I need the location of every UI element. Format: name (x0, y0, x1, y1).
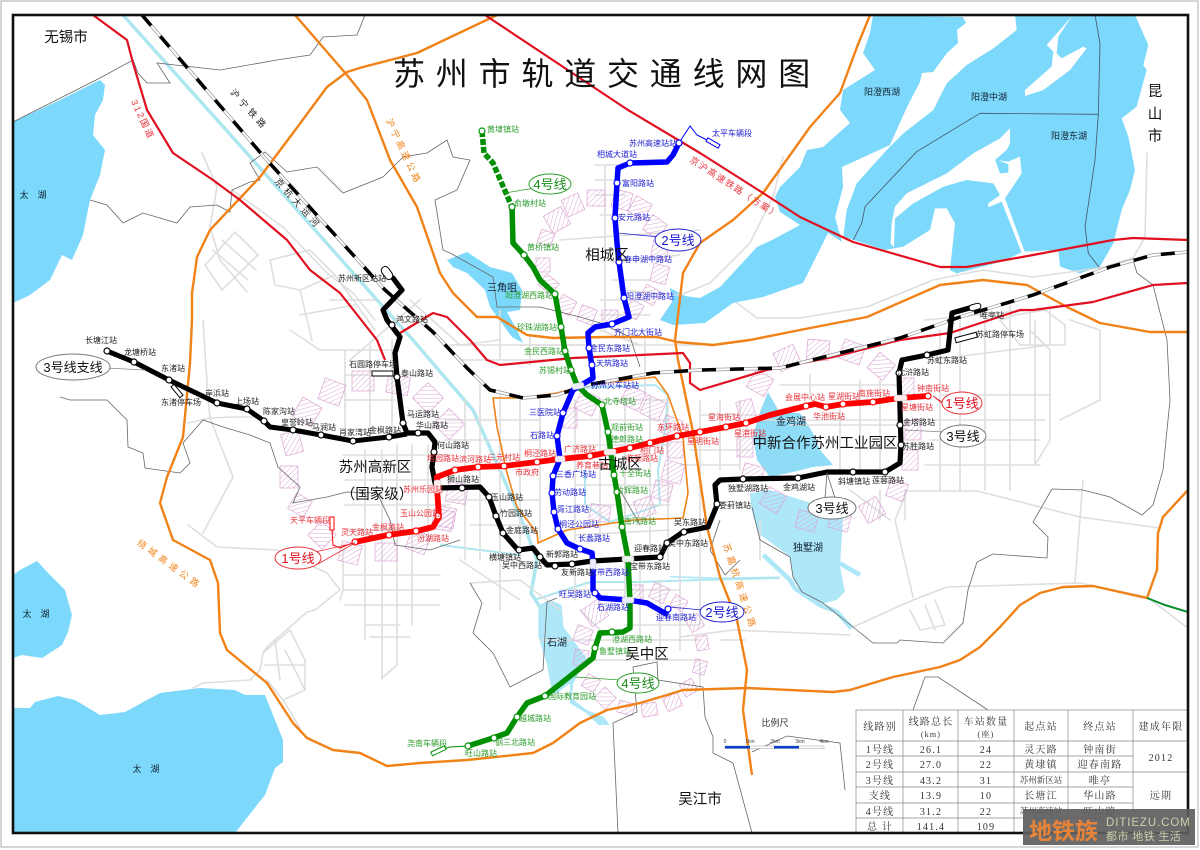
station labels: line 2: 宝带西路站 (589, 567, 629, 577)
station labels: line 1: 星湖街站 (828, 391, 860, 401)
station labels: line 3: 苏胜路站 (902, 441, 934, 451)
station labels: line 2: 太平车辆段 (712, 128, 752, 138)
railway: Shanghai-Nanjing (142, 15, 1188, 398)
summary table: 43.2 (920, 776, 942, 787)
road and railway names: 京杭大运河 (273, 176, 324, 231)
station labels: line 3: 石圆路停车场 (349, 359, 397, 369)
station labels: line 2 (529, 128, 752, 622)
road and railway names: 沪宁铁路 (228, 87, 271, 133)
summary table: 2012 (1149, 753, 1173, 764)
station labels: line 3: 竹园路站 (500, 508, 532, 518)
station labels: line 2: 迎春南路站 (656, 612, 696, 622)
summary table: (座) (978, 729, 994, 739)
station labels: line 3: 吴中西路站 (502, 560, 542, 570)
watermark (1023, 809, 1195, 845)
station labels: line 3: 苏州新区站站 (338, 273, 386, 283)
station labels: line 3: 吴东路站 (674, 517, 706, 527)
station labels: line 2: 齐门北大街站 (614, 327, 662, 337)
summary table: 长塘江 (1024, 789, 1058, 802)
lake names: 太 湖 (22, 608, 50, 619)
summary table: 109 (977, 822, 995, 833)
lake names: 太 湖 (132, 763, 160, 774)
lake names: 阳澄西湖 (864, 86, 900, 97)
station labels: line 1: 金枫路站 (372, 522, 404, 532)
summary table: 1号线 (866, 743, 894, 756)
station labels: line 2: 相城大道站 (597, 149, 637, 159)
station labels: line 2: 春申湖中路站 (624, 254, 672, 264)
station labels: line 1: 钟南街站 (917, 383, 949, 393)
lake names: 石湖 (547, 637, 567, 649)
summary table: 13.9 (920, 791, 942, 802)
station labels: line 4: 钢三北路站 (495, 737, 535, 747)
station labels: line 3: 新郭路站 (546, 549, 578, 559)
station labels: line 4: 俞墩村站 (514, 198, 546, 208)
summary table (856, 710, 1188, 833)
station labels: line 3: 东渚站 (161, 363, 185, 373)
station labels: line 3: 泰山路站 (401, 368, 433, 378)
station labels: line 3: 宝带东路站 (630, 561, 670, 571)
summary table: 31 (980, 776, 992, 787)
station labels: line 2: 天筑路站 (596, 358, 628, 368)
station labels: line 1: 滨河路站 (459, 454, 491, 464)
station labels: line 3: 金塔路站 (903, 417, 935, 427)
station labels: line 2: 旺吴路站 (559, 589, 591, 599)
summary table: 唯亭 (1089, 774, 1111, 787)
district and city names: 苏州高新区 (339, 459, 411, 476)
station labels: line 1: 玉山公园站 (400, 508, 440, 518)
summary table: 141.4 (917, 822, 945, 833)
station labels: line 4: 黄埭镇站 (487, 124, 519, 134)
station labels: line 4: 北寺塔站 (604, 396, 636, 406)
summary table: 2号线 (866, 758, 894, 771)
district and city names: 中新合作苏州工业园区 (752, 435, 898, 452)
station labels: line 1: 华池街站 (813, 411, 845, 421)
station labels: line 4: 南环路站 (624, 516, 656, 526)
station labels: line 1: 临顿路站 (626, 453, 658, 463)
summary table: 起点站 (1024, 720, 1058, 733)
metro line 4 (431, 128, 630, 756)
station labels: line 2: 石湖路站 (597, 602, 629, 612)
station labels: line 3: 东渚停车场 (161, 397, 201, 407)
station labels: line 2: 安元路站 (618, 212, 650, 222)
station labels: line 1: 相门站 (640, 445, 664, 455)
district and city names: （国家级） (341, 486, 413, 503)
line callout: 3号线 south: 3号线 (815, 501, 849, 516)
summary table: 4号线 (866, 805, 894, 818)
orange highways (160, 15, 1188, 775)
road and railway names: 京沪高速铁路（方案） (688, 154, 782, 220)
summary table: 华山路 (1083, 789, 1117, 802)
line callout: 3号线支线: 3号线支线 (43, 360, 103, 375)
station labels: line 3: 陈家沟站 (263, 406, 295, 416)
scale bar: 0 (724, 739, 727, 745)
station labels: line 4: 竹辉路站 (616, 485, 648, 495)
title: 苏州市轨道交通线网图 (393, 56, 821, 92)
station labels: line 3: 娄葑镇站 (719, 500, 751, 510)
station labels: line 2: 三香广场站 (556, 469, 596, 479)
metro line 3 (372, 265, 982, 569)
metro line 1 (330, 393, 931, 548)
scale bar (724, 717, 829, 748)
station labels: line 1: 会展中心站 (785, 392, 825, 402)
line callout: 1号线 east (933, 392, 982, 414)
station labels: line 3: 斜塘镇站 (838, 476, 870, 486)
station labels: line 1: 星明街站 (687, 436, 719, 446)
station labels: line 3: 龙塘桥站 (124, 347, 156, 357)
lake names (19, 86, 1087, 774)
summary table: 支线 (869, 789, 891, 802)
scale bar: 比例尺 (761, 717, 789, 728)
station labels: line 1: 市政府 (515, 467, 539, 477)
district and city names: 吴中区 (625, 646, 669, 663)
station labels: line 3: 长塘江站 (85, 335, 117, 345)
line callout: 4号线 north: 4号线 (533, 177, 567, 192)
station labels: line 3: 何山路站 (437, 440, 469, 450)
station labels: line 2: 劳动路站 (554, 487, 586, 497)
lake names: 三角咀 (487, 282, 517, 294)
line callout: 2号线 south (670, 602, 744, 622)
station labels: line 2: 石路站 (530, 430, 554, 440)
station labels: line 3: 狮山路站 (447, 474, 479, 484)
station labels: line 2: 长蠡路站 (578, 533, 610, 543)
rivers (123, 15, 780, 615)
scale bar: 3km (795, 739, 805, 745)
watermark: 地铁族 (1029, 818, 1098, 844)
summary table: 线路别 (863, 720, 897, 733)
station labels: line 3: 苏虹路停车场 (976, 329, 1024, 339)
lake names: 阳澄东湖 (1051, 130, 1087, 141)
summary table: 27.0 (920, 760, 942, 771)
station labels: line 4: 黄桥镇站 (527, 242, 559, 252)
station labels: line 4: 旺山路站 (465, 748, 497, 758)
line callout: 1号线 west (275, 543, 355, 569)
station labels: line 4: 澄湖西路站 (612, 634, 652, 644)
district and city names: 山 (1148, 106, 1162, 123)
line callout: 3号线 south (808, 473, 856, 519)
water: Yangcheng Lake (840, 16, 1148, 274)
summary table: 终点站 (1083, 720, 1117, 733)
road and railway names (129, 87, 782, 632)
line callout: 4号线 south (575, 673, 659, 693)
station labels: line 3: 友新路站 (561, 567, 593, 577)
station labels: line 1 (290, 383, 949, 543)
summary table: 苏州新区站 (1020, 775, 1063, 785)
station labels: line 2: 金民东路站 (590, 343, 630, 353)
watermark: 都市 地铁 生活 (1106, 829, 1181, 843)
line callout: 1号线 west: 1号线 (281, 551, 315, 566)
road and railway names: 绕城高速公路 (135, 537, 205, 592)
summary table: 26.1 (920, 745, 942, 756)
summary table: 31.2 (920, 807, 942, 818)
line callout: 3号线支线 (36, 354, 145, 380)
summary table: 建成年限 (1139, 720, 1183, 733)
station labels: line 2: 富阳路站 (622, 178, 654, 188)
station labels: line 3: 独墅湖路站 (728, 483, 768, 493)
lake names: 太 湖 (19, 189, 47, 200)
station labels: line 3: 唯亭站 (980, 310, 1004, 320)
summary table: 总 计 (867, 820, 893, 833)
scale bar: 1km (745, 739, 755, 745)
water: west Yangcheng Lake (660, 15, 966, 325)
station labels: line 3: 吴中东路站 (668, 538, 708, 548)
district and city names: 吴江市 (678, 791, 722, 808)
summary table: (km) (921, 730, 941, 739)
station labels: line 1: 灵天路站 (341, 527, 373, 537)
station labels: line 4: 越城路站 (519, 713, 551, 723)
station labels: line 4: 德郎路站 (611, 434, 643, 444)
line callout: 3号线 east: 3号线 (946, 429, 980, 444)
summary table: 灵天路 (1024, 743, 1058, 756)
lake names: 独墅湖 (793, 541, 823, 554)
water: Dushu Lake (670, 490, 860, 628)
planned development parcels (280, 189, 921, 717)
station labels: line 3: 沈浒路站 (897, 367, 929, 377)
station labels: line 4: 尧南车辆段 (407, 738, 447, 748)
station labels: line 3: 金枫路站 (369, 425, 401, 435)
watermark: DITIEZU.COM (1106, 817, 1191, 829)
green provincial road (1147, 598, 1188, 612)
station labels: line 4: 阳澄湖西路站 (505, 290, 553, 300)
station labels: line 3: 迎春路站 (634, 543, 666, 553)
summary table: 24 (980, 745, 992, 756)
station labels: line 4: 国际教育园站 (548, 691, 596, 701)
summary table: 苏州高速站 (1020, 806, 1063, 816)
summary table: 远期 (1150, 789, 1172, 802)
summary table: 钟南街 (1083, 743, 1117, 756)
station labels: line 3: 岸浜站 (205, 388, 229, 398)
station labels: line 1: 南施街站 (858, 388, 890, 398)
line callout: 2号线 north (617, 229, 701, 251)
station labels: line 3: 横塘镇站 (489, 552, 521, 562)
water: Tai Lake (13, 80, 283, 833)
road and railway names: 沪宁高速公路 (384, 117, 424, 186)
summary table: 旺山路 (1083, 805, 1117, 818)
summary table: 10 (980, 791, 992, 802)
station labels: line 1: 桐泾路站 (524, 448, 556, 458)
district and city names: 市 (1148, 128, 1162, 145)
station labels: line 1: 汾湖路站 (417, 533, 449, 543)
station labels: line 1: 塔园路站 (427, 453, 459, 463)
station labels: line 3: 鸿文路站 (396, 314, 428, 324)
station labels: line 3: 苏虹东路站 (927, 355, 967, 365)
road network (188, 153, 1188, 728)
station labels: line 2: 阳澄湖中路站 (626, 291, 674, 301)
summary table: 22 (980, 760, 992, 771)
line callout: 2号线 north: 2号线 (661, 233, 695, 248)
water: Shi Lake (538, 600, 610, 725)
station labels: line 4: 十全街站 (619, 468, 651, 478)
station labels: line 3: 金庭路站 (506, 525, 538, 535)
station labels: line 1: 星海街站 (708, 412, 740, 422)
station labels: line 4: 鲁墅镇站 (599, 646, 631, 656)
district and city names: 古城区 (598, 456, 642, 473)
station labels: line 2: 苏州高速站站 (629, 138, 677, 148)
lake names: 阳澄中湖 (971, 91, 1007, 102)
water: Sanjiaoju (447, 252, 523, 343)
station labels: line 3: 马运路站 (407, 409, 439, 419)
station labels: line 3: 玉山路站 (491, 492, 523, 502)
station labels: line 1: 养育巷站 (576, 460, 608, 470)
district and city names: 相城区 (585, 247, 629, 264)
red national roads and high-speed rail (93, 15, 1188, 390)
summary table: 线路总长 (909, 715, 953, 728)
scale bar: 2km (770, 739, 780, 745)
summary table: 22 (980, 807, 992, 818)
line callout: 2号线 south: 2号线 (705, 605, 739, 620)
summary table: 3号线 (866, 774, 894, 787)
station labels: line 3: 肖家湾站 (339, 427, 371, 437)
station labels: line 2: 桐泾公园站 (559, 519, 599, 529)
station labels: line 2: 胥江路站 (557, 504, 589, 514)
station labels: line 1: 星港街站 (734, 428, 766, 438)
line callout: 4号线 south: 4号线 (621, 676, 655, 691)
summary table: 车站数量 (964, 715, 1008, 728)
metro line 2 (549, 126, 720, 615)
summary table: 迎春南路 (1078, 758, 1122, 771)
station labels: line 2: 苏州火车站站 (591, 380, 639, 390)
station labels: line 3 (85, 273, 1024, 577)
lake names: 金鸡湖 (776, 415, 806, 428)
station labels: line 3: 莲蓉路站 (872, 475, 904, 485)
station labels: line 1: 苏州乐园站 (403, 484, 443, 494)
station labels: line 1: 东环路站 (657, 422, 689, 432)
metro line 3 branch (104, 348, 407, 444)
station labels: line 2: 三医院站 (529, 407, 561, 417)
road and railway names: 312国道 (129, 98, 157, 141)
line callout: 1号线 east: 1号线 (945, 396, 979, 411)
station labels: line 1: 天平车辆段 (290, 515, 330, 525)
station labels: line 4 (407, 124, 656, 758)
road and railway names: 苏嘉杭高速公路 (721, 542, 760, 632)
station labels: line 1: 广济路站 (564, 444, 596, 454)
summary table: 黄埭镇 (1024, 758, 1058, 771)
station labels: line 3: 皇誉岭站 (281, 417, 313, 427)
line callout: 4号线 north (505, 174, 571, 194)
district and city names: 昆 (1148, 84, 1162, 100)
scale bar: 4km (819, 739, 829, 745)
station labels: line 3: 华山路站 (416, 420, 448, 430)
station labels: line 1: 星塘街站 (901, 402, 933, 412)
line callout: 3号线 east (905, 425, 986, 447)
station labels: line 4: 观前街站 (611, 422, 643, 432)
district and city names: 无锡市 (44, 29, 88, 46)
station labels: line 3: 上场站 (235, 396, 259, 406)
station labels: line 4: 珍珠湖路站 (517, 322, 557, 332)
station labels: line 4: 金民西路站 (524, 346, 564, 356)
station labels: line 3: 金鸡湖站 (783, 482, 815, 492)
station labels: line 4: 苏锡村站 (539, 365, 571, 375)
interchange stations (434, 382, 907, 603)
station labels: line 3: 马涧站 (312, 422, 336, 432)
water: Jinji Lake (753, 392, 833, 477)
station labels: line 1: 三元村站 (488, 452, 520, 462)
